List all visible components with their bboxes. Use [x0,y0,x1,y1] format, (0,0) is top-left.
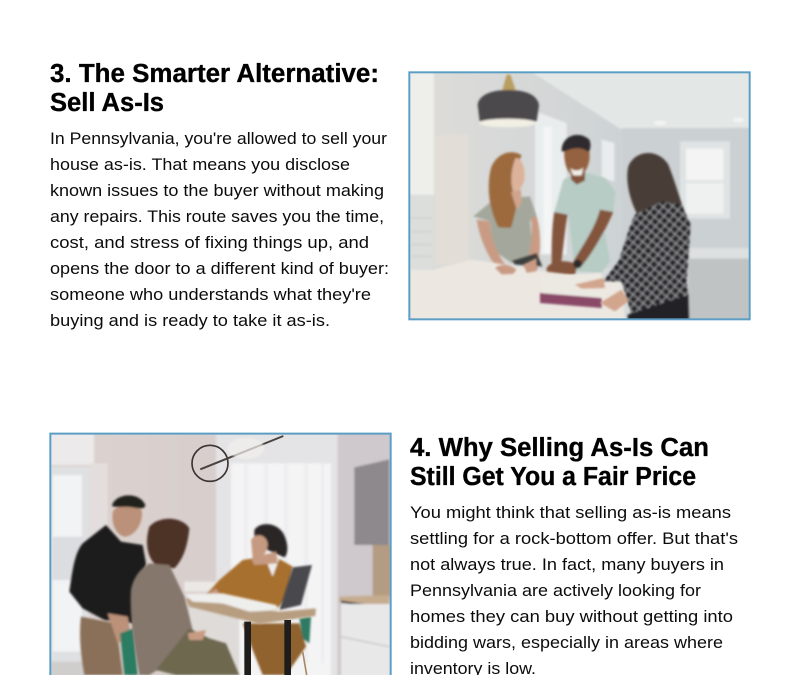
body text: section 3: cost, and stress of fixing things up, and [50,233,369,252]
papers and binder [540,273,605,308]
woman left [473,152,542,273]
body text: section 3: opens the door to a different kind of buyer: [50,259,389,278]
woman in grey blazer [131,519,239,675]
heading: section 3: 3. The Smarter Alternative: [50,60,379,88]
body text: section 3: someone who understands what they're [50,285,371,304]
lamp [478,75,539,127]
body text: section 3: house as-is. That means you disclose [50,155,350,174]
far window [680,141,730,219]
pendant light [192,436,283,481]
body text: section 3 [50,129,389,330]
body text: section 3: any repairs. This route saves you the time, [50,207,384,226]
window left [50,467,89,662]
body text: section 4: not always true. In fact, many buyers in [410,555,724,574]
photo: couple meeting agent at table [50,433,391,675]
body text: section 4: Pennsylvania are actively looking for [410,581,701,600]
heading: section 3 [50,60,379,117]
man centre [547,135,616,279]
body text: section 4: bidding wars, especially in areas where [410,633,723,652]
heading: section 4 [410,434,709,491]
curtain [216,433,338,675]
heading: section 4: 4. Why Selling As-Is Can [410,434,709,462]
body text: section 4: homes they can buy without getting into [410,607,733,626]
body text: section 4: You might think that selling as-is means [410,503,731,522]
section 3: smarter alternative text [50,60,389,330]
heading: section 3: Sell As-Is [50,89,164,117]
body text: section 3: In Pennsylvania, you're allowed to sell your [50,129,388,148]
agent [206,524,311,675]
photo: couple and agent at kitchen counter [409,72,750,320]
body text: section 3: buying and is ready to take it as-is. [50,311,330,330]
man in black [69,495,146,675]
body text: section 4 [410,503,738,675]
counter [409,258,625,320]
woman right [575,153,691,320]
side window [535,111,567,255]
body text: section 3: known issues to the buyer without making [50,181,384,200]
right wall and cabinets [338,433,391,675]
heading: section 4: Still Get You a Fair Price [410,463,696,491]
body text: section 4: settling for a rock-bottom offer. But that's [410,529,738,548]
table [184,565,316,624]
section 4: fair price text [410,434,738,675]
